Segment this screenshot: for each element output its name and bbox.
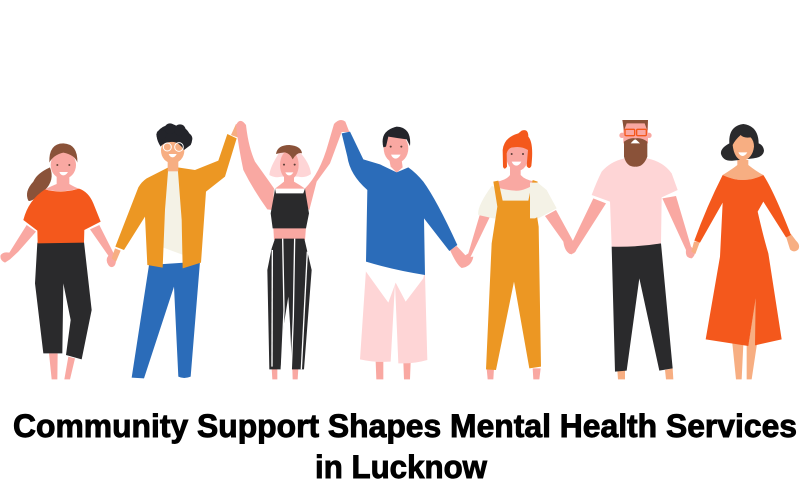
title: in Lucknow bbox=[315, 449, 487, 485]
person 1: woman in orange top bbox=[0, 143, 116, 379]
title bbox=[13, 408, 797, 485]
person 5: red-haired woman in yellow overalls bbox=[459, 130, 557, 379]
person 3: woman in black crop top and striped trousers bbox=[236, 120, 349, 379]
person 6: bearded man in pink t-shirt bbox=[530, 120, 695, 379]
person 7: woman in long orange dress bbox=[691, 124, 799, 379]
person 4: man in blue hoodie and pink trousers bbox=[342, 127, 473, 379]
title: Community Support Shapes Mental Health Services bbox=[13, 408, 797, 444]
person 2: man in yellow jacket and blue jeans bbox=[112, 123, 241, 378]
